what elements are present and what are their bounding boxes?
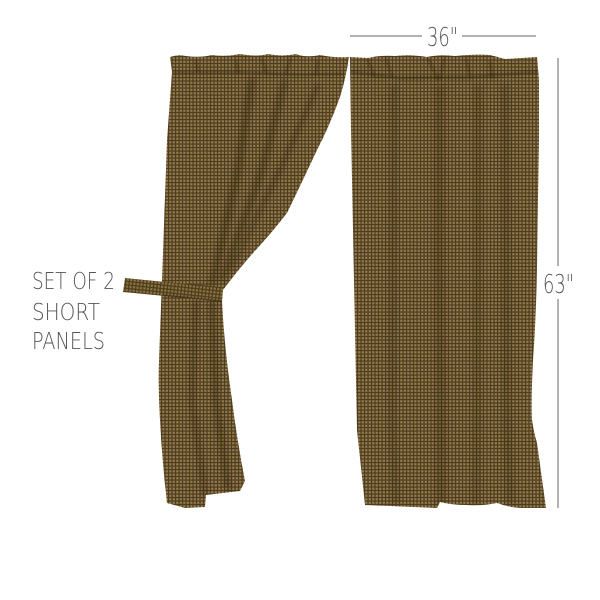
infographic: curtain panels with dimensions (34, 26, 572, 508)
product label: SET OF 2 (32, 269, 115, 295)
width dimension: 36 inches: 36" (427, 23, 458, 53)
height dimension: 63 inches: 63" (543, 270, 574, 300)
product label (32, 269, 115, 355)
tieback strap (123, 278, 223, 301)
left curtain folds (192, 78, 318, 495)
left curtain gathered header (172, 58, 343, 75)
right curtain folds (392, 85, 510, 505)
left curtain panel (150, 50, 355, 512)
product label: SHORT (32, 300, 100, 326)
product label: PANELS (32, 329, 105, 355)
right curtain panel (345, 50, 550, 512)
right curtain gathered header (350, 58, 539, 80)
